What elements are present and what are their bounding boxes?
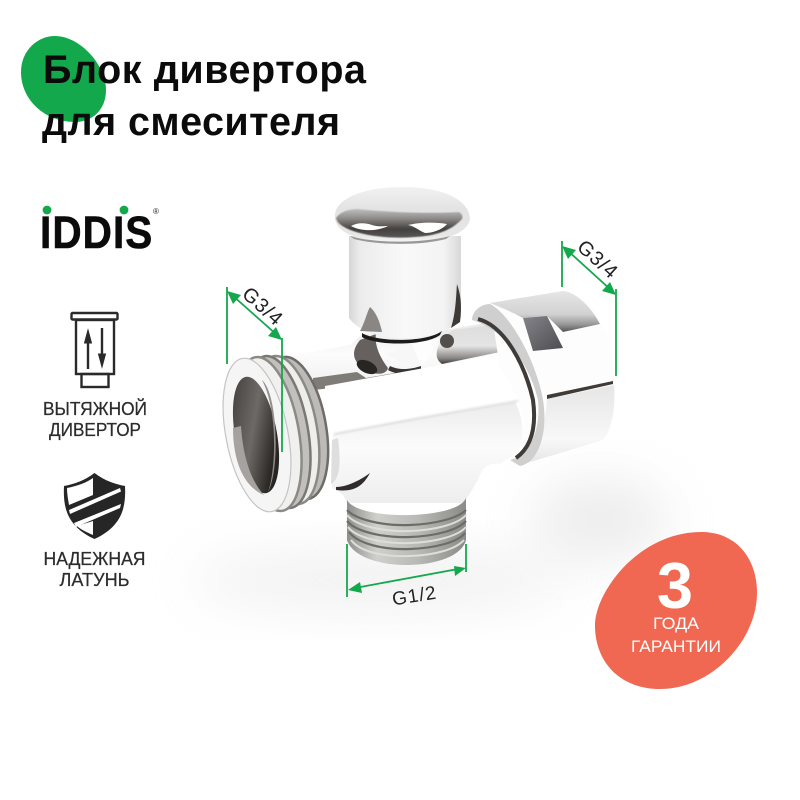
label: pull-out diverter xyxy=(43,398,147,440)
dimension: bottom G1/2 xyxy=(347,544,466,610)
dimension: bottom G1/2: G1/2 xyxy=(391,583,438,610)
label: reliable brass: ЛАТУНЬ xyxy=(60,570,130,590)
icon: pull-out diverter xyxy=(72,313,118,387)
right collar xyxy=(472,291,615,466)
product: diverter block photo xyxy=(212,187,615,565)
warranty badge: ГОДА xyxy=(653,614,700,633)
label: pull-out diverter: ДИВЕРТОР xyxy=(49,420,141,440)
background shadow xyxy=(190,480,670,610)
logo: IDDIS: IDDIS xyxy=(40,208,153,259)
dimension: right G3/4: G3/4 xyxy=(573,236,621,283)
dimension: left G3/4 xyxy=(227,283,286,452)
rear upper tube and joint xyxy=(290,322,500,390)
warranty badge: 3 xyxy=(657,549,693,622)
label: reliable brass: НАДЕЖНАЯ xyxy=(44,549,146,569)
title: для смесителя xyxy=(42,100,340,144)
green blob xyxy=(21,36,106,122)
left threaded end xyxy=(212,351,338,517)
title xyxy=(42,48,367,144)
icon: brass shield xyxy=(64,473,125,539)
title: Блок дивертора xyxy=(43,48,367,92)
dimension: right G3/4 xyxy=(562,236,621,376)
main body with tee xyxy=(325,356,524,503)
knob: dome xyxy=(335,187,470,244)
warranty badge: ГАРАНТИИ xyxy=(631,637,721,656)
warranty badge xyxy=(595,532,757,689)
bottom thread xyxy=(347,498,466,565)
logo: IDDIS: ® xyxy=(153,207,159,216)
label: reliable brass xyxy=(44,549,146,590)
dimension: left G3/4: G3/4 xyxy=(238,283,286,330)
knob: cylinder xyxy=(349,236,461,344)
label: pull-out diverter: ВЫТЯЖНОЙ xyxy=(43,398,147,419)
